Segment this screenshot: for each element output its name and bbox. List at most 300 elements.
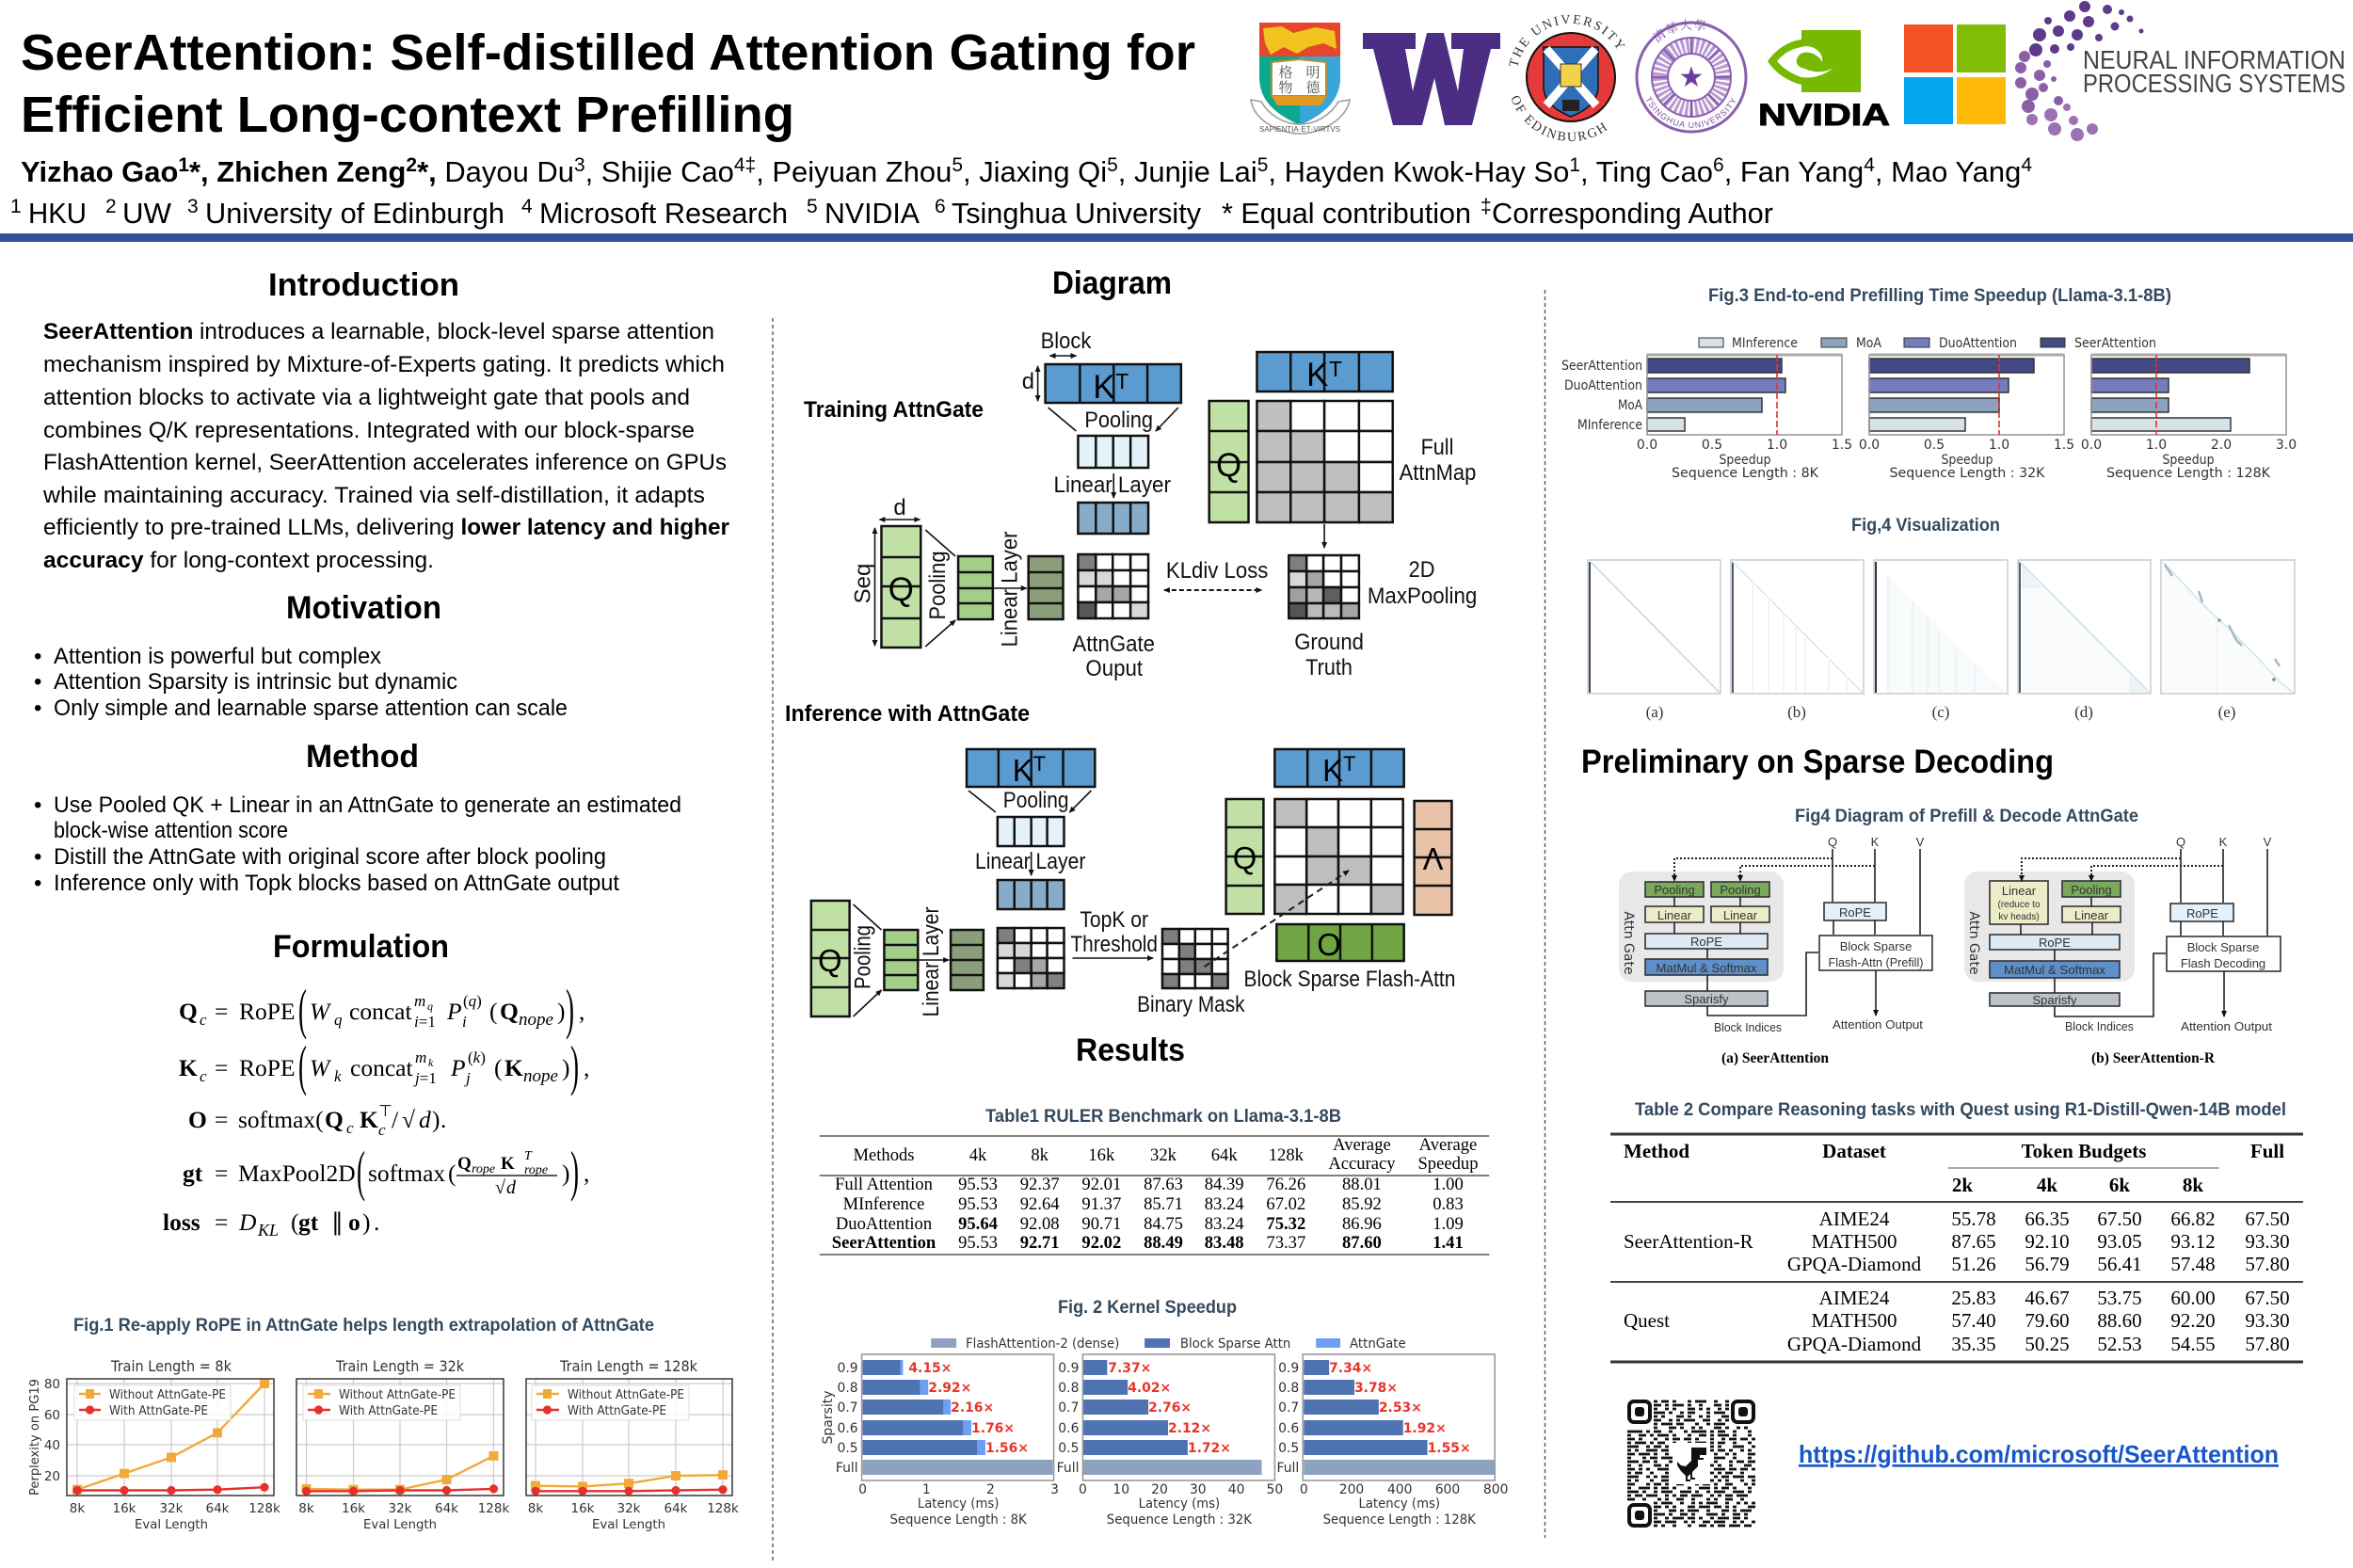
logo: Tsinghua seal: TSINGHUA UNIVERSITY	[1646, 96, 1736, 128]
panel: fig 4 visualization	[1588, 516, 2295, 721]
table 2: 25.83	[1951, 1287, 1996, 1309]
authors: 4	[1864, 154, 1875, 176]
table 1: 128k	[1269, 1145, 1305, 1165]
table 1: 4k	[969, 1145, 987, 1165]
chart: train length 128k: Train Length = 128k	[559, 1357, 698, 1375]
table 1: 85.92	[1342, 1194, 1382, 1214]
logo: NeurIPS	[2015, 1, 2345, 141]
chart: kernel speedup 128K: 0.7	[1278, 1400, 1299, 1416]
chart: kernel speedup 8K: 0.5	[837, 1441, 858, 1456]
equation: loss: loss	[163, 1208, 200, 1236]
authors: , Fan Yang	[1724, 155, 1864, 188]
affiliations: 4	[521, 196, 533, 217]
authors: , Shijie Cao	[585, 155, 734, 188]
diagram: seerattention: Sparisfy	[1685, 992, 1729, 1006]
equation: Kc: (	[298, 1034, 307, 1096]
diagram: training attngate: Q	[888, 571, 914, 608]
logo: Microsoft	[1904, 24, 2006, 124]
chart: kernel speedup 128K: Full	[1276, 1461, 1299, 1476]
diagram: training attngate: K	[1306, 357, 1328, 393]
table 2: SeerAttention-R	[1624, 1230, 1753, 1253]
chart: train length 8k	[27, 1357, 280, 1532]
chart: train length 8k: 128k	[248, 1501, 280, 1516]
chart: kernel speedup 128K: 0.8	[1278, 1381, 1299, 1396]
chart: speedup 8K: 0.0	[1637, 438, 1657, 453]
diagram: inference with attngate: Pooling	[1003, 788, 1068, 813]
table 1: Full Attention	[835, 1175, 934, 1194]
chart: speedup 8K: SeerAttention	[1561, 359, 1642, 374]
diagram: training attngate: 2D	[1409, 557, 1435, 583]
table 2: 79.60	[2025, 1309, 2070, 1332]
table 1: 92.71	[1020, 1233, 1060, 1253]
chart: kernel speedup 32K: 2.12×	[1168, 1421, 1211, 1436]
authors: Yizhao Gao	[21, 155, 178, 188]
chart: kernel speedup 8K: 0	[858, 1482, 867, 1497]
heatmap labels: (e)	[2218, 703, 2235, 721]
chart: kernel speedup 8K: Latency (ms)	[918, 1496, 999, 1512]
diagram: seerattention-r: K	[2219, 835, 2228, 849]
diagram: inference with attngate: Threshold	[1070, 932, 1158, 957]
table 1: SeerAttention	[832, 1233, 936, 1253]
chart: kernel speedup 8K: 0.9	[837, 1361, 858, 1376]
bullet list: Use Pooled QK + Linear in an AttnGate to generate an estimated	[54, 792, 681, 818]
chart: kernel speedup 8K: Full	[836, 1461, 858, 1476]
chart: kernel speedup 8K: Sequence Length : 8K	[889, 1512, 1028, 1528]
heatmap labels: (c)	[1932, 703, 1949, 721]
logo: HKU crest: 物	[1278, 77, 1293, 97]
table 2: 66.35	[2025, 1208, 2070, 1230]
equation: gt: √	[495, 1177, 505, 1198]
logo: NVIDIA: NVIDIA	[1758, 98, 1890, 132]
header rule	[0, 233, 2353, 242]
diagram: seerattention-r: Flash Decoding	[2181, 956, 2265, 970]
table 1: Accuracy	[1328, 1154, 1396, 1174]
chart: train length 128k: 128k	[707, 1501, 739, 1516]
logo: UW W	[1363, 33, 1500, 125]
diagram: seerattention: Linear	[1657, 908, 1692, 922]
chart: kernel speedup 128K: Latency (ms)	[1358, 1496, 1440, 1512]
chart: kernel speedup 128K: 3.78×	[1354, 1381, 1398, 1396]
table 2: 50.25	[2025, 1333, 2070, 1355]
affiliations: UW	[122, 197, 172, 230]
heading: diagram: Diagram	[1052, 265, 1172, 301]
authors: 6	[1713, 154, 1724, 176]
chart: speedup 8K: MInference	[1577, 418, 1642, 433]
diagram: inference with attngate: TopK or	[1080, 907, 1148, 933]
chart: speedup 32K: 1.5	[2054, 438, 2074, 453]
equation: O: √	[402, 1106, 415, 1133]
authors: 2	[406, 154, 417, 176]
equation: Qc: =	[215, 998, 228, 1025]
bullet list: •	[34, 644, 41, 669]
chart: speedup 32K: 0.0	[1859, 438, 1880, 453]
table 2: 53.75	[2097, 1287, 2142, 1309]
caption: fig 3: Fig.3 End-to-end Prefilling Time Speedup (Llama-3.1-8B)	[1708, 286, 2171, 306]
legend: fig 3: MInference	[1732, 336, 1798, 351]
chart: train length 128k: 8k	[528, 1501, 543, 1516]
logo: Edinburgh seal: OF EDINBURGH	[1512, 96, 1608, 141]
panel: formulation	[163, 929, 589, 1240]
equation: Qc: =1	[419, 1013, 436, 1031]
logo: Tsinghua seal: 清華大學	[1652, 19, 1705, 43]
diagram: seerattention: Pooling	[1720, 883, 1761, 897]
equation: gt: rope	[472, 1162, 495, 1176]
diagram: seerattention: Attention Output	[1833, 1017, 1923, 1032]
equation: O: Q	[325, 1106, 344, 1133]
heading: training attngate: Training AttnGate	[804, 397, 984, 423]
table 2: 67.50	[2245, 1208, 2290, 1230]
table 2: Method	[1624, 1140, 1689, 1162]
table 1: 1.09	[1433, 1214, 1464, 1234]
panel: introduction	[42, 267, 729, 573]
chart: train length 128k: 32k	[617, 1501, 641, 1516]
equation: O: softmax(	[238, 1106, 324, 1133]
table 2: 57.40	[1951, 1309, 1996, 1332]
table 1: DuoAttention	[836, 1214, 933, 1234]
logo: NVIDIA	[1758, 30, 1890, 132]
chart: train length 128k: Without AttnGate-PE	[568, 1387, 684, 1402]
chart: kernel speedup 128K: 0.5	[1278, 1441, 1299, 1456]
table 1: 88.49	[1144, 1233, 1183, 1253]
bullet list: Distill the AttnGate with original score after block pooling	[54, 844, 606, 870]
equation: loss: KL	[257, 1221, 279, 1240]
authors: 1	[1569, 154, 1580, 176]
equation: Kc: )	[562, 1054, 570, 1081]
authors: 5	[1257, 154, 1268, 176]
paragraph	[42, 319, 729, 573]
chart: train length 128k: Eval Length	[592, 1517, 665, 1532]
heatmap b	[1731, 560, 1864, 694]
diagram: inference with attngate: T	[1343, 752, 1355, 776]
equation: Kc: ,	[584, 1054, 589, 1081]
equation: Qc: (	[489, 998, 497, 1025]
equation: Kc: m	[415, 1048, 426, 1066]
logo: HKU crest: 格	[1278, 62, 1293, 82]
affiliations: 2	[105, 196, 117, 217]
diagram: training attngate: Ouput	[1085, 656, 1143, 681]
logo: HKU crest: 德	[1305, 77, 1321, 97]
table 1: 83.24	[1205, 1214, 1244, 1234]
diagram: training attngate: Pooling	[925, 552, 951, 619]
diagram: seerattention-r: Attention Output	[2181, 1019, 2272, 1033]
chart: train length 32k: Eval Length	[363, 1517, 437, 1532]
diagram: seerattention-r: Sparisfy	[2033, 993, 2077, 1007]
authors: 1	[178, 154, 189, 176]
bullet list: Attention is powerful but complex	[54, 644, 381, 669]
diagram: inference with attngate	[811, 749, 1455, 1017]
table 2: 88.60	[2097, 1309, 2142, 1332]
table 1: 8k	[1031, 1145, 1049, 1165]
equation: O: ⊤	[378, 1102, 392, 1120]
table 1: 91.37	[1081, 1194, 1121, 1214]
legend: fig 2: Block Sparse Attn	[1180, 1336, 1290, 1352]
chart: speedup 128K: 3.0	[2276, 438, 2297, 453]
chart: train length 8k: 32k	[160, 1501, 184, 1516]
chart: speedup 8K: Sequence Length : 8K	[1672, 466, 1819, 481]
diagram: seerattention: Q	[1828, 835, 1837, 849]
table 1: 95.53	[958, 1175, 998, 1194]
chart: train length 8k: 40	[44, 1438, 60, 1453]
equation: Qc: W	[310, 998, 332, 1025]
chart: speedup 128K: 0.0	[2081, 438, 2102, 453]
chart: kernel speedup 128K	[1276, 1354, 1509, 1528]
table 2: 92.20	[2170, 1309, 2216, 1332]
diagram: training attngate: MaxPooling	[1368, 584, 1477, 609]
heatmap labels: (b)	[1787, 703, 1806, 721]
paragraph: combines Q/K representations. Integrated with our block-sparse	[43, 418, 695, 443]
diagram: inference with attngate: K	[1013, 753, 1033, 788]
chart: train length 8k: Perplexity on PG19	[27, 1379, 42, 1496]
chart: kernel speedup 8K: 1.76×	[971, 1421, 1015, 1436]
bullet list: Attention Sparsity is intrinsic but dynamic	[54, 669, 457, 695]
table 2: Full	[2250, 1140, 2284, 1162]
heatmap d	[2018, 560, 2151, 694]
chart: kernel speedup 128K: 400	[1387, 1482, 1413, 1497]
chart: kernel speedup 32K: 0.5	[1058, 1441, 1079, 1456]
affiliations: 1	[10, 196, 22, 217]
legend: fig 3: SeerAttention	[2074, 336, 2156, 351]
diagram: inference with attngate: Q	[1233, 840, 1257, 875]
chart: speedup 128K: 2.0	[2211, 438, 2232, 453]
table 1: 87.63	[1144, 1175, 1183, 1194]
chart: speedup 8K: 1.5	[1832, 438, 1852, 453]
heading: motivation: Motivation	[286, 590, 441, 626]
table 2: 54.55	[2170, 1333, 2216, 1355]
equation: gt: softmax	[368, 1160, 445, 1187]
equation: loss: o	[348, 1208, 360, 1236]
authors: , Mao Yang	[1875, 155, 2021, 188]
equation: Kc: k	[334, 1067, 342, 1085]
equation: Qc: nope	[519, 1010, 553, 1030]
bullet list: •	[34, 669, 41, 695]
diagram: training attngate: Pooling	[1084, 408, 1153, 433]
authors: , Jiaxing Qi	[963, 155, 1107, 188]
diagram: training attngate	[851, 328, 1477, 681]
chart: speedup 128K: Sequence Length : 128K	[2106, 466, 2271, 481]
table 1: 84.39	[1205, 1175, 1244, 1194]
legend: fig 3: MoA	[1856, 336, 1881, 351]
title: SeerAttention: Self-distilled Attention Gating for	[21, 24, 1195, 81]
chart: kernel speedup 32K: 0.9	[1058, 1361, 1079, 1376]
bullet list: •	[34, 871, 41, 896]
chart: kernel speedup 8K: 2.92×	[928, 1381, 971, 1396]
diagram: seerattention: MatMul & Softmax	[1657, 961, 1757, 975]
chart: kernel speedup 32K: 0	[1079, 1482, 1087, 1497]
chart: kernel speedup 32K: Full	[1057, 1461, 1079, 1476]
paragraph: mechanism inspired by Mixture-of-Experts gating. It predicts which	[43, 352, 725, 377]
equation: O: c	[378, 1121, 386, 1139]
chart: kernel speedup 128K: 0.9	[1278, 1361, 1299, 1376]
table 1: 95.53	[958, 1194, 998, 1214]
chart: kernel speedup 128K: 800	[1483, 1482, 1509, 1497]
chart: speedup 128K	[2081, 355, 2297, 481]
authors: *, Zhichen Zeng	[189, 155, 406, 188]
diagram: inference with attngate: V	[1423, 841, 1443, 876]
paragraph: while maintaining accuracy. Trained via self-distillation, it adapts	[42, 483, 705, 508]
caption: table 2: Table 2 Compare Reasoning tasks with Quest using R1-Distill-Qwen-14B model	[1635, 1100, 2286, 1120]
diagram: training attngate: AttnGate	[1072, 632, 1155, 657]
table 2: 56.79	[2025, 1253, 2070, 1275]
chart: kernel speedup 32K: Sequence Length : 32K	[1107, 1512, 1253, 1528]
table 1: 83.48	[1205, 1233, 1244, 1253]
chart: kernel speedup 32K: 7.37×	[1108, 1361, 1151, 1376]
equation: Qc: m	[414, 992, 425, 1010]
equation: O: K	[360, 1106, 378, 1133]
qr code	[1627, 1401, 1755, 1526]
panel: diagram	[785, 265, 1477, 1017]
chart: kernel speedup 32K	[1057, 1354, 1283, 1528]
paragraph: FlashAttention kernel, SeerAttention accelerates inference on GPUs	[43, 450, 727, 475]
table 2: Token Budgets	[2022, 1140, 2146, 1162]
chart: train length 8k: Train Length = 8k	[110, 1357, 232, 1375]
chart: speedup 128K: 1.0	[2146, 438, 2167, 453]
chart: kernel speedup 8K: 1	[922, 1482, 931, 1497]
chart: train length 8k: 8k	[70, 1501, 85, 1516]
chart: kernel speedup 128K: Sequence Length : 128K	[1323, 1512, 1477, 1528]
chart: kernel speedup 128K: 2.53×	[1379, 1400, 1422, 1416]
diagram: training attngate: Q	[1216, 447, 1241, 484]
chart: train length 32k: 8k	[298, 1501, 314, 1516]
table 2: 87.65	[1951, 1230, 1996, 1253]
table 1: Average	[1419, 1135, 1477, 1155]
table 2: MATH500	[1811, 1230, 1897, 1253]
logo: HKU crest: 明	[1305, 62, 1321, 82]
column dividers	[773, 290, 1545, 1560]
logo: Edinburgh seal: THE UNIVERSITY	[1509, 15, 1625, 66]
chart: speedup 32K	[1859, 355, 2074, 481]
affiliations: ‡	[1481, 196, 1492, 217]
chart: train length 128k: 64k	[664, 1501, 688, 1516]
table 2: 35.35	[1951, 1333, 1996, 1355]
chart: train length 8k: 80	[44, 1377, 60, 1392]
authors: 4‡	[734, 154, 756, 176]
equation: Qc: Q	[500, 998, 519, 1025]
equation: Kc: K	[179, 1054, 198, 1081]
diagram: seerattention-r: kv heads)	[1998, 912, 2040, 922]
equation: gt: K	[501, 1154, 515, 1174]
equation: O: O	[188, 1106, 207, 1133]
equation: Kc: (k)	[468, 1048, 486, 1066]
affiliations: NVIDIA	[824, 197, 920, 230]
title	[21, 24, 1195, 143]
equation: loss: (	[291, 1208, 299, 1236]
chart: train length 128k: With AttnGate-PE	[568, 1403, 666, 1418]
legend: fig 3	[1699, 336, 2156, 351]
equation: Qc: )	[557, 998, 565, 1025]
table 1: 73.37	[1266, 1233, 1305, 1253]
diagram: seerattention-r: Attn Gate	[1966, 911, 1981, 975]
chart: kernel speedup 128K: 1.55×	[1428, 1441, 1471, 1456]
diagram: inference with attngate: Linear Layer	[975, 849, 1085, 874]
diagram: training attngate: Block	[1041, 328, 1091, 354]
diagram: seerattention: RoPE	[1690, 935, 1722, 949]
chart: kernel speedup 8K: 0.7	[837, 1400, 858, 1416]
chart: kernel speedup 128K: 0	[1300, 1482, 1308, 1497]
diagram: inference with attngate: O	[1317, 927, 1341, 962]
legend: fig 2: FlashAttention-2 (dense)	[966, 1336, 1119, 1352]
caption: table 1: Table1 RULER Benchmark on Llama-3.1-8B	[985, 1107, 1341, 1127]
diagram: inference with attngate: K	[1322, 753, 1343, 788]
affiliations: 5	[807, 196, 818, 217]
equation: O: d	[419, 1106, 431, 1133]
authors: 5	[952, 154, 963, 176]
table 2: 67.50	[2097, 1208, 2142, 1230]
equation: Qc	[179, 978, 584, 1040]
equation: gt: rope	[524, 1163, 548, 1177]
equation: Qc: q	[427, 1000, 433, 1013]
table 2: 60.00	[2170, 1287, 2216, 1309]
diagram: seerattention: Pooling	[1654, 883, 1695, 897]
authors: 3	[574, 154, 585, 176]
table 1: 64k	[1211, 1145, 1238, 1165]
diagram: seerattention: Attn Gate	[1621, 911, 1636, 975]
header	[0, 24, 2353, 242]
equation: Qc: i	[462, 1013, 467, 1031]
panel: results	[820, 1032, 1509, 1528]
heading: introduction: Introduction	[268, 267, 459, 303]
affiliations: HKU	[28, 197, 87, 230]
equation: O: )	[432, 1106, 440, 1133]
equation: Kc: K	[504, 1054, 523, 1081]
panel: fig 1	[27, 1316, 739, 1532]
title: Efficient Long-context Prefilling	[21, 87, 794, 143]
table 1: Speedup	[1417, 1154, 1479, 1174]
table 2: 57.80	[2245, 1253, 2290, 1275]
table 1: 92.37	[1020, 1175, 1060, 1194]
chart: train length 32k: 64k	[435, 1501, 458, 1516]
authors: , Peiyuan Zhou	[756, 155, 952, 188]
chart: kernel speedup 8K	[821, 1354, 1059, 1528]
diagram: training attngate: Linear Layer	[1054, 472, 1171, 498]
table 1	[820, 1135, 1489, 1255]
logo: HKU crest: SAPIENTIA·ET·VIRTVS	[1259, 125, 1340, 134]
diagram: seerattention-r: Block Sparse	[2187, 940, 2259, 954]
chart: kernel speedup 32K: 10	[1112, 1482, 1129, 1497]
equation: gt	[183, 1140, 589, 1202]
equation: Qc: )	[566, 978, 574, 1040]
table 1: Average	[1333, 1135, 1391, 1155]
caption: visualization: Fig,4 Visualization	[1851, 516, 2000, 536]
diagram: seerattention: Flash-Attn (Prefill)	[1828, 955, 1924, 969]
heading: inference with attngate: Inference with AttnGate	[785, 701, 1030, 727]
chart: kernel speedup 128K: 200	[1339, 1482, 1364, 1497]
table 2: 55.78	[1951, 1208, 1996, 1230]
chart: kernel speedup 32K: Latency (ms)	[1139, 1496, 1220, 1512]
table 2: 67.50	[2245, 1287, 2290, 1309]
diagram: seerattention-r: RoPE	[2039, 936, 2071, 950]
diagram: inference with attngate: Block Sparse Flash-Attn	[1244, 967, 1455, 992]
chart: train length 8k: 20	[44, 1469, 60, 1484]
authors: 4	[2021, 154, 2032, 176]
affiliations: 6	[935, 196, 946, 217]
chart: train length 8k: 16k	[113, 1501, 136, 1516]
table 1: 88.01	[1342, 1175, 1382, 1194]
table 2: 66.82	[2170, 1208, 2216, 1230]
chart: speedup 32K: Sequence Length : 32K	[1890, 466, 2045, 481]
panel: table 2	[1610, 1100, 2303, 1362]
chart: train length 8k: Eval Length	[135, 1517, 208, 1532]
chart: kernel speedup 128K: 1.92×	[1403, 1421, 1447, 1436]
equation: Kc: =1	[420, 1069, 437, 1087]
heatmap c	[1874, 560, 2008, 694]
table 2: 52.53	[2097, 1333, 2142, 1355]
bullet list: Inference only with Topk blocks based on AttnGate output	[54, 871, 619, 896]
table 1: 76.26	[1266, 1175, 1305, 1194]
chart: train length 32k: Train Length = 32k	[335, 1357, 465, 1375]
logo: Tsinghua seal: ★	[1679, 62, 1704, 93]
equation: loss: gt	[298, 1208, 319, 1236]
chart: kernel speedup 32K: 30	[1190, 1482, 1207, 1497]
